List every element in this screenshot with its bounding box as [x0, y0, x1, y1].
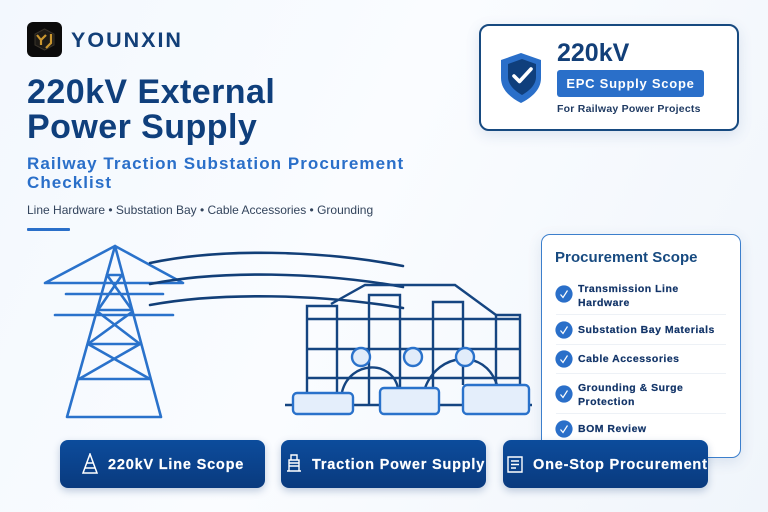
- button: procurement: [503, 440, 708, 488]
- button: procurement: One-Stop Procurement: [533, 457, 708, 473]
- button: traction: [281, 440, 486, 488]
- check 3: [555, 350, 573, 368]
- check 5: [555, 420, 573, 438]
- icon: insulator: [287, 454, 301, 472]
- checklist item 1: Hardware: [578, 297, 630, 309]
- title: [27, 73, 275, 146]
- panel heading: Procurement Scope: [555, 249, 698, 266]
- icon: tower: [82, 453, 98, 474]
- power lines: [150, 253, 403, 308]
- brand name: YOUNXIN: [71, 28, 183, 52]
- checklist item 5: BOM Review: [578, 423, 647, 435]
- illustration: substation: [285, 285, 532, 414]
- icon: document: [507, 456, 523, 473]
- panel: EPC badge: [479, 24, 739, 131]
- checklist item 1: Transmission Line: [578, 283, 679, 295]
- checklist item 3: Cable Accessories: [578, 353, 680, 365]
- icon: shield: [501, 53, 541, 103]
- subtitle: Checklist: [27, 173, 112, 192]
- title: Power Supply: [27, 108, 257, 146]
- checklist item 4: Grounding & Surge: [578, 382, 683, 394]
- checklist item 2: Substation Bay Materials: [578, 324, 715, 336]
- badge value: 220kV: [557, 39, 629, 67]
- checklist item 4: [578, 382, 683, 408]
- badge pill: [557, 70, 704, 97]
- panel: procurement scope: [541, 234, 741, 458]
- button: traction: Traction Power Supply: [312, 457, 485, 473]
- check 1: [555, 285, 573, 303]
- subtitle: [27, 154, 404, 192]
- checklist item 4: Protection: [578, 396, 635, 408]
- check 2: [555, 321, 573, 339]
- checklist item 1: [578, 283, 679, 309]
- button: line scope: [60, 440, 265, 488]
- title: 220kV External: [27, 73, 275, 111]
- tagline: Line Hardware • Substation Bay • Cable Accessories • Grounding: [27, 203, 373, 217]
- accent rule: [27, 228, 70, 231]
- subtitle: Railway Traction Substation Procurement: [27, 154, 404, 173]
- badge caption: For Railway Power Projects: [557, 103, 701, 115]
- badge pill: EPC Supply Scope: [566, 76, 695, 91]
- button: line scope: 220kV Line Scope: [108, 457, 244, 473]
- check 4: [555, 385, 573, 403]
- logo: [27, 22, 62, 57]
